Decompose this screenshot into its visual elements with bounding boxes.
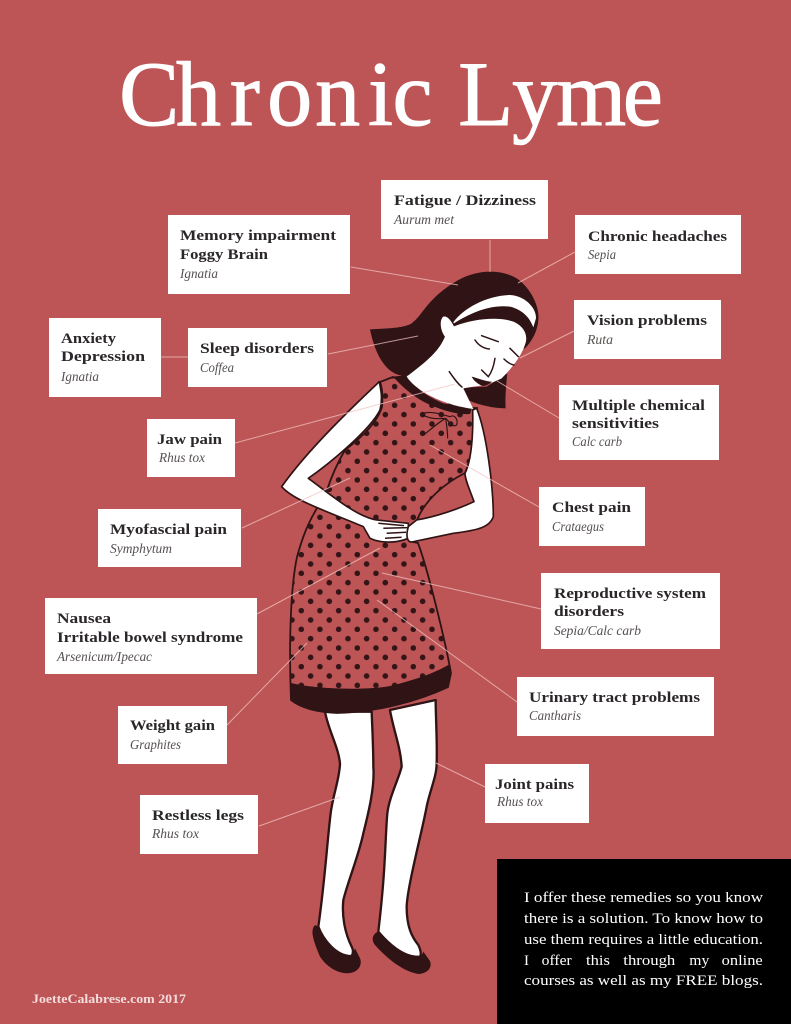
left arm <box>282 382 408 542</box>
right arm <box>407 408 493 542</box>
fingers <box>378 523 408 538</box>
panel: black message box: I <box>524 953 529 969</box>
face details: brows, eyes, nose, jaw <box>449 336 518 387</box>
callout: myofascial: Symphytum <box>110 541 172 556</box>
callout: anxiety: Ignatia <box>60 369 99 384</box>
callout: reproductive <box>541 573 720 649</box>
panel: black message box: online <box>722 953 763 969</box>
callout: fatigue: Aurum met <box>393 212 455 227</box>
callout: chronic headaches: Chronic headaches <box>588 229 727 245</box>
panel: black message box: my <box>689 953 710 969</box>
callout: memory: Memory impairment <box>180 228 336 244</box>
callout: restless legs <box>140 795 258 854</box>
lower hair <box>462 373 507 408</box>
callout: memory: Ignatia <box>179 266 218 281</box>
callout: urinary <box>517 677 714 736</box>
figure: woman in polka dot dress <box>282 272 539 974</box>
collar <box>393 375 472 414</box>
white headband <box>453 295 536 327</box>
callout: chemical sensitivities: Calc carb <box>572 434 622 449</box>
bow <box>422 412 457 438</box>
callout: chest: Chest pain <box>552 500 632 516</box>
callout: chest <box>539 487 645 546</box>
callout: fatigue <box>381 180 548 239</box>
legs and shoes <box>312 700 437 974</box>
callout: nausea <box>45 598 257 674</box>
callout: weight <box>118 706 227 764</box>
callout: urinary: Urinary tract problems <box>529 690 700 706</box>
callout: vision: Vision problems <box>587 313 707 329</box>
callout: memory <box>168 215 350 294</box>
callout: nausea: Irritable bowel syndrome <box>57 630 243 646</box>
callout: joint: Rhus tox <box>496 794 543 809</box>
callout: chemical sensitivities: sensitivities <box>572 416 659 432</box>
callout: sleep: Coffea <box>200 360 234 375</box>
callout: anxiety: Depression <box>61 349 146 365</box>
callout: vision <box>574 300 721 359</box>
callout: weight: Weight gain <box>130 718 216 734</box>
callout: fatigue: Fatigue / Dizziness <box>394 193 536 209</box>
callout: jaw: Jaw pain <box>157 432 223 448</box>
callout: sleep: Sleep disorders <box>200 341 314 357</box>
callout: joint: Joint pains <box>495 777 574 793</box>
callout: reproductive: Reproductive system <box>554 586 707 602</box>
callout: chronic headaches <box>575 215 741 274</box>
callout: chemical sensitivities: Multiple chemical <box>572 398 705 414</box>
callout: jaw <box>147 419 235 477</box>
callout: myofascial: Myofascial pain <box>110 522 228 538</box>
callout: anxiety: Anxiety <box>61 331 117 347</box>
callout: memory: Foggy Brain <box>180 247 269 263</box>
callout: nausea: Nausea <box>57 611 112 627</box>
callout: sleep <box>188 328 327 387</box>
callout: anxiety <box>49 318 161 397</box>
panel: black message box: offer <box>542 953 572 969</box>
callout: myofascial <box>98 509 241 567</box>
panel: black message box: this <box>586 953 610 969</box>
panel: black message box: there is a solution. To know how to <box>524 911 763 927</box>
callout: vision: Ruta <box>586 332 613 347</box>
callout: nausea: Arsenicum/Ipecac <box>56 649 152 664</box>
callout: chemical sensitivities <box>559 385 719 460</box>
panel: black message box: through <box>623 953 676 969</box>
neck and face <box>407 317 526 409</box>
callout: restless legs: Rhus tox <box>151 826 199 841</box>
connector lines <box>161 240 575 826</box>
panel: black message box <box>497 859 791 1024</box>
title: Chronic Lyme <box>119 43 663 145</box>
callout: chest: Crataegus <box>552 519 604 534</box>
callout: jaw: Rhus tox <box>158 450 205 465</box>
footer credit: JoetteCalabrese.com 2017 <box>32 991 187 1006</box>
callout: reproductive: Sepia/Calc carb <box>554 623 641 638</box>
callout: urinary: Cantharis <box>529 708 581 723</box>
panel: black message box: I offer these remedies so you know <box>524 890 763 906</box>
callout: restless legs: Restless legs <box>152 808 244 824</box>
callout: weight: Graphites <box>130 737 181 752</box>
dress <box>290 377 477 713</box>
hair <box>370 272 539 376</box>
panel: black message box: use them requires a little education. <box>524 932 763 948</box>
callout: reproductive: disorders <box>554 604 624 620</box>
callout: chronic headaches: Sepia <box>588 247 616 262</box>
upper body: arms, head and hair <box>282 272 539 542</box>
mouth <box>472 377 492 386</box>
panel: black message box: courses as well as my FREE blogs. <box>524 973 763 989</box>
head <box>370 272 539 409</box>
callout: joint <box>485 764 589 823</box>
